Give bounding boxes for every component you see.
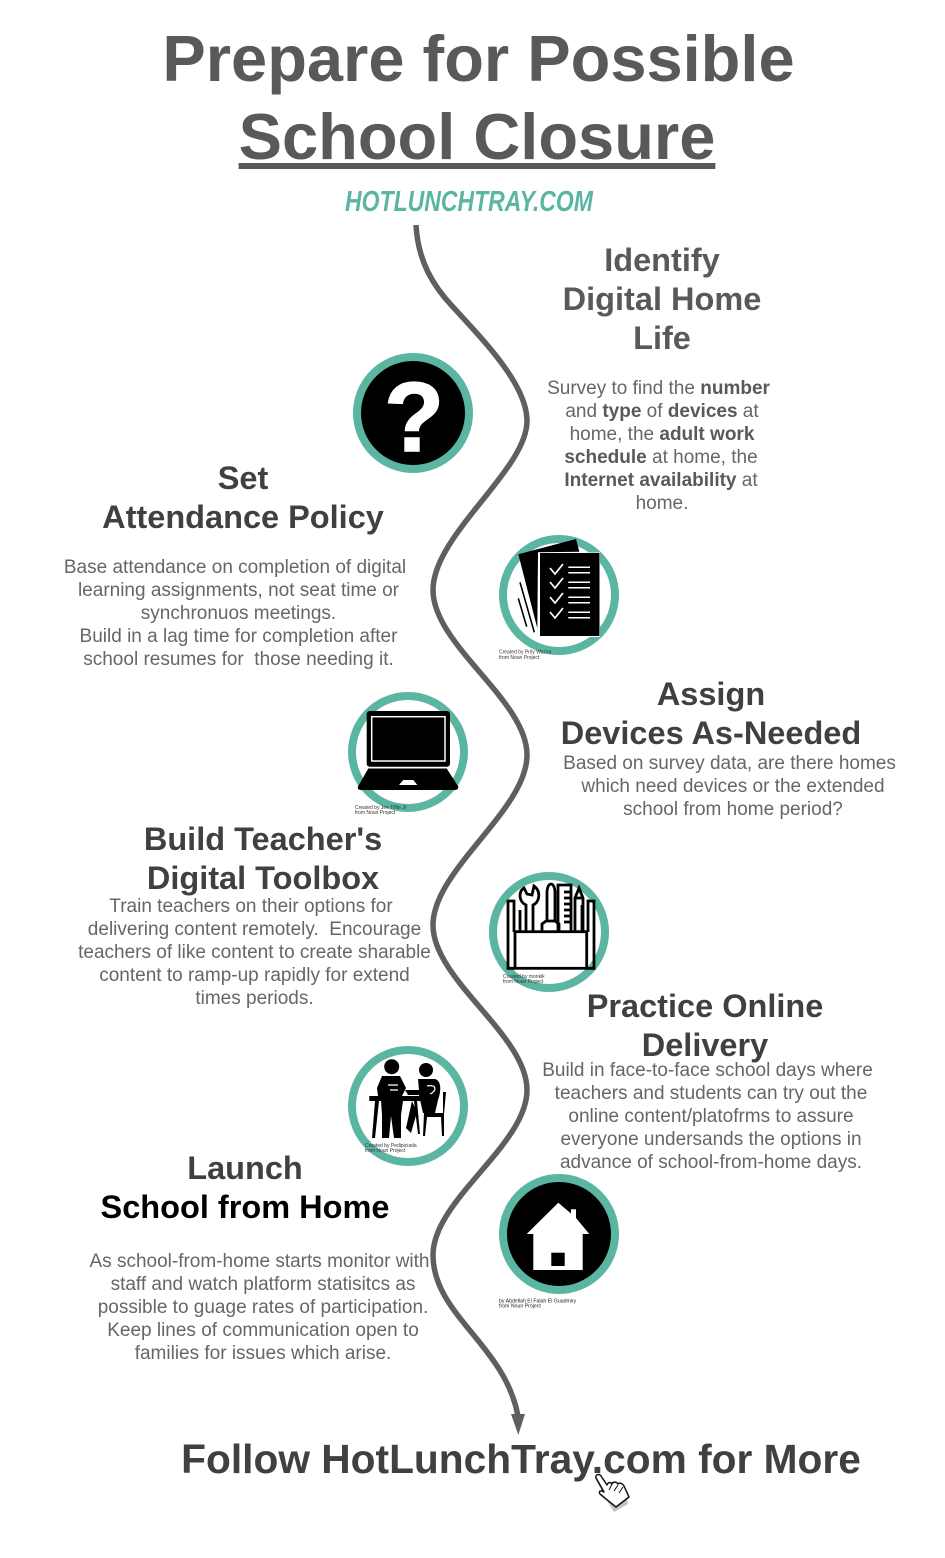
text: practice online delivery: everyone undersands the options in (560, 1129, 862, 1150)
text: set attendance policy: school resumes for those needing it. (83, 649, 394, 670)
heading: launch school from home (101, 1150, 389, 1225)
text: identify digital home life: home, the adult work (570, 424, 754, 445)
text: teacher toolbox (78, 896, 431, 1009)
heading: identify digital home life: Digital Home (563, 281, 761, 317)
text: set attendance policy (64, 557, 406, 670)
icon: toolbox (493, 876, 605, 988)
icon: checklist papers: Created by Prity Wazza (499, 650, 552, 656)
icon: teacher and student at table: from Noun Project (365, 1148, 406, 1154)
text: launch school from home: Keep lines of communication open to (107, 1320, 419, 1341)
text: identify digital home life: Survey to find the number (547, 378, 770, 399)
title (162, 22, 795, 173)
text: identify digital home life: home. (636, 493, 688, 514)
text: practice online delivery: advance of school-from-home days. (560, 1152, 862, 1173)
heading: teacher toolbox: Build Teacher's (144, 821, 382, 857)
text: practice online delivery: teachers and students can try out the (555, 1083, 867, 1104)
heading: teacher toolbox: Digital Toolbox (147, 860, 379, 896)
heading: identify digital home life (563, 242, 761, 356)
heading: launch school from home: Launch (187, 1150, 303, 1186)
icon: laptop: Created by Jee Tiffie Jr (355, 805, 407, 811)
heading: identify digital home life: Identify (604, 242, 720, 278)
text: set attendance policy: Build in a lag time for completion after (80, 626, 397, 647)
icon: toolbox: from Noun Project (503, 979, 544, 985)
heading: assign devices (561, 676, 861, 751)
heading: assign devices: Devices As-Needed (561, 715, 861, 751)
text: practice online delivery: Build in face-to-face school days where (542, 1060, 873, 1081)
icon: checklist papers: from Noun Project (499, 655, 540, 661)
text: assign devices (563, 753, 896, 820)
text: launch school from home (90, 1251, 430, 1364)
heading: set attendance policy: Set (218, 460, 268, 496)
text: teacher toolbox: Train teachers on their options for (109, 896, 393, 917)
icon: checklist papers (499, 539, 615, 661)
winding arrow path (416, 225, 527, 1435)
text: teacher toolbox: teachers of like content to create sharable (78, 942, 431, 963)
text: assign devices: which need devices or the extended (581, 776, 885, 797)
heading: set attendance policy: Attendance Policy (102, 499, 384, 535)
text: set attendance policy: synchronuos meetings. (141, 603, 336, 624)
text: teacher toolbox: content to ramp-up rapidly for extend (99, 965, 410, 986)
title: School Closure (239, 100, 715, 173)
heading: identify digital home life: Life (633, 320, 691, 356)
heading: practice online delivery: Practice Online (587, 988, 823, 1024)
icon: teacher and student at table: Created by Pedipiciada (365, 1143, 417, 1149)
footer call to action: Follow HotLunchTray.com for More (181, 1436, 861, 1482)
title: Prepare for Possible (162, 22, 795, 95)
text: teacher toolbox: times periods. (195, 988, 314, 1009)
heading: assign devices: Assign (657, 676, 765, 712)
text: practice online delivery (542, 1060, 873, 1173)
text: identify digital home life (547, 378, 770, 514)
text: set attendance policy: learning assignments, not seat time or (78, 580, 399, 601)
text: assign devices: Based on survey data, are there homes (563, 753, 896, 774)
icon: toolbox: Created by monkik (503, 974, 545, 980)
website name: HOTLUNCHTRAY.COM (345, 185, 593, 217)
heading: set attendance policy (102, 460, 384, 535)
icon: teacher and student at table (352, 1050, 464, 1162)
heading: practice online delivery (587, 988, 823, 1063)
text: launch school from home: possible to guage rates of participation. (98, 1297, 428, 1318)
heading: practice online delivery: Delivery (642, 1027, 768, 1063)
icon: house (499, 1178, 615, 1310)
text: launch school from home: families for issues which arise. (135, 1343, 391, 1364)
icon: laptop: from Noun Project (355, 810, 396, 816)
icon: house: from Noun Project (499, 1304, 541, 1310)
icon: pointing hand cursor (595, 1474, 630, 1512)
text: set attendance policy: Base attendance on completion of digital (64, 557, 406, 578)
text: launch school from home: As school-from-home starts monitor with (90, 1251, 430, 1272)
text: identify digital home life: schedule at home, the (564, 447, 758, 468)
text: teacher toolbox: delivering content remotely. Encourage (88, 919, 421, 940)
text: practice online delivery: online content/platofrms to assure (568, 1106, 854, 1127)
heading: teacher toolbox (144, 821, 382, 896)
text: identify digital home life: and type of devices at (565, 401, 759, 422)
icon: house: by Abdellah El Falah El Guadmiry (499, 1298, 577, 1304)
text: assign devices: school from home period? (623, 799, 843, 820)
text: identify digital home life: Internet availability at (564, 470, 758, 491)
heading: launch school from home: School from Home (101, 1189, 389, 1225)
icon: question mark: ? (384, 362, 444, 472)
text: launch school from home: staff and watch platform statisitcs as (111, 1274, 415, 1295)
icon: laptop (352, 696, 464, 816)
icon: question mark (357, 357, 469, 472)
